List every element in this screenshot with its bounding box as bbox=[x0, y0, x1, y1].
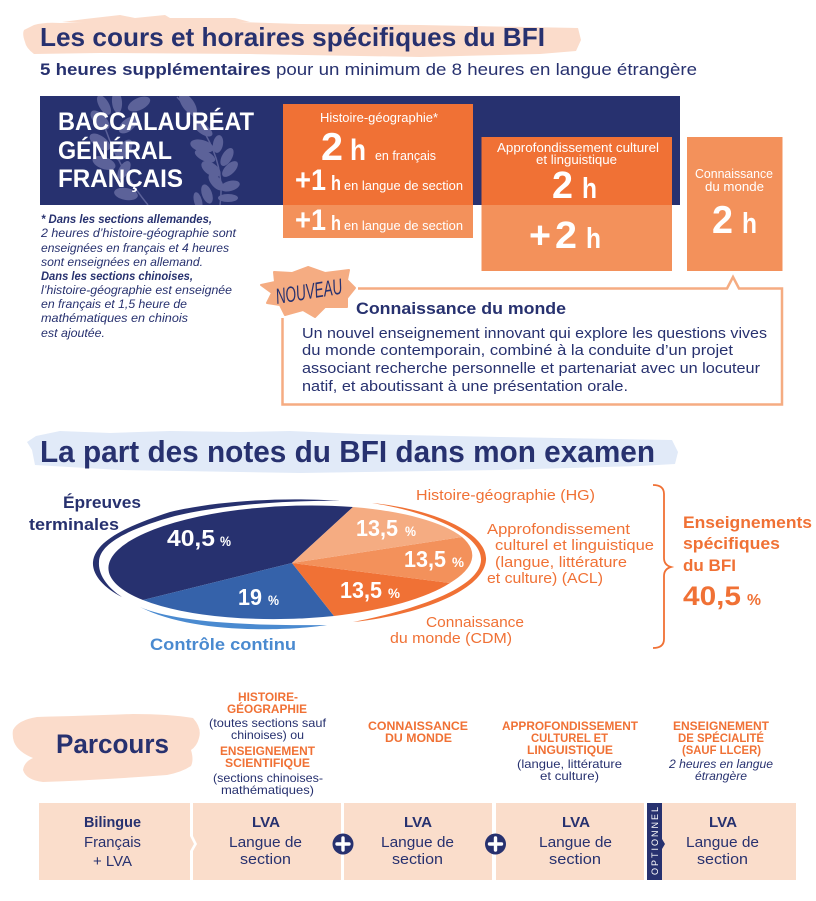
banner: baccalauréat général français: FRANÇAIS bbox=[58, 165, 183, 193]
label: enseignements spécifiques: du BFI bbox=[683, 556, 736, 575]
cell: lva langue de section 1: section bbox=[240, 851, 291, 868]
brace bbox=[653, 485, 671, 648]
cell: bilingue: + LVA bbox=[93, 853, 132, 870]
label: approfondissement: Approfondissement bbox=[487, 521, 631, 538]
column header: histoire-géographie: HISTOIRE- bbox=[238, 690, 298, 704]
column header: approfondissement: APPROFONDISSEMENT bbox=[502, 719, 639, 733]
cell: lva langue de section 2: Langue de bbox=[381, 834, 454, 851]
column header: histoire-géographie: chinoises) ou bbox=[231, 728, 304, 742]
panel: connaissance du monde hours bbox=[687, 137, 782, 271]
label: approfondissement: culturel et linguistique bbox=[495, 537, 654, 554]
subtitle: 5 heures supplémentaires pour un minimum de 8 heures en langue étrangère bbox=[40, 60, 697, 79]
footnote: mathématiques en chinois bbox=[41, 311, 188, 325]
slice: contrôle continu bbox=[143, 563, 334, 619]
heading: parcours bbox=[13, 714, 200, 782]
cell: lva langue de section 2: LVA bbox=[404, 814, 432, 831]
label: enseignements spécifiques: % bbox=[747, 592, 761, 609]
pie chart: 13,5 bbox=[356, 515, 398, 541]
footnote: 2 heures d’histoire-géographie sont bbox=[40, 226, 237, 240]
banner: baccalauréat général français: GÉNÉRAL bbox=[58, 136, 172, 165]
cell: bilingue bbox=[39, 803, 194, 880]
label: enseignements spécifiques: spécifiques bbox=[683, 534, 780, 553]
label: histoire-géographie: Histoire-géographie (HG) bbox=[416, 487, 595, 504]
cell: lva langue de section 3: section bbox=[549, 851, 601, 868]
pie chart: % bbox=[452, 554, 465, 570]
cell: lva langue de section 1: LVA bbox=[252, 814, 280, 831]
footnote bbox=[40, 212, 237, 340]
column header: approfondissement: LINGUISTIQUE bbox=[527, 743, 613, 757]
tag: optionnel: OPTIONNEL bbox=[650, 807, 660, 875]
cell: lva langue de section 1: Langue de bbox=[229, 834, 302, 851]
swoosh: orange bbox=[353, 503, 486, 622]
label: épreuves terminales: terminales bbox=[29, 515, 119, 534]
badge: nouveau bbox=[261, 267, 355, 317]
column header: enseignement de spécialité: ENSEIGNEMENT bbox=[673, 719, 770, 733]
cell: lva langue de section 3: LVA bbox=[562, 814, 590, 831]
footnote: Dans les sections chinoises, bbox=[41, 269, 193, 283]
footnote: enseignées en français et 4 heures bbox=[41, 241, 229, 255]
column header: approfondissement: (langue, littérature bbox=[517, 757, 622, 771]
pie chart: % bbox=[388, 585, 401, 601]
cell: bilingue: Français bbox=[84, 834, 141, 851]
label: connaissance du monde: Connaissance bbox=[426, 614, 524, 631]
pie chart: 13,5 bbox=[340, 577, 382, 603]
panel: connaissance du monde hours: h bbox=[742, 208, 757, 240]
icon: plus 1 bbox=[332, 834, 354, 854]
column header: histoire-géographie: (toutes sections sauf bbox=[209, 716, 327, 730]
column header: histoire-géographie: mathématiques) bbox=[221, 783, 314, 797]
column header: enseignement de spécialité bbox=[668, 719, 773, 783]
column header: histoire-géographie: (sections chinoises- bbox=[213, 771, 323, 785]
panel: histoire-géographie hours: + bbox=[295, 164, 311, 197]
label: contrôle continu: Contrôle continu bbox=[150, 636, 296, 654]
panel: approfondissement hours bbox=[482, 137, 672, 271]
panel: histoire-géographie hours: 1 bbox=[311, 204, 326, 237]
footnote: en français et 1,5 heure de bbox=[41, 297, 187, 311]
panel: approfondissement hours: h bbox=[582, 173, 597, 205]
swoosh: navy bbox=[93, 499, 340, 597]
banner: baccalauréat général français bbox=[40, 90, 680, 211]
callout: connaissance du monde: du monde contemporain, combiné à la conduite d’un projet bbox=[302, 342, 734, 359]
cell: lva langue de section 2: section bbox=[392, 851, 443, 868]
footnote: sont enseignées en allemand. bbox=[41, 255, 203, 269]
pie chart: % bbox=[220, 533, 231, 549]
column header: approfondissement: et culture) bbox=[540, 769, 599, 783]
panel: approfondissement hours: 2 bbox=[552, 165, 573, 207]
cell: bilingue: Bilingue bbox=[84, 814, 141, 831]
heading: share of grades: La part des notes du BFI dans mon examen bbox=[40, 434, 655, 469]
icon: plus 2 bbox=[485, 834, 506, 854]
slice: connaissance du monde bbox=[292, 563, 450, 616]
panel: approfondissement hours: et linguistique bbox=[536, 153, 617, 167]
cell: lva langue de section 3 bbox=[496, 803, 644, 880]
icon: laurel branches bbox=[90, 96, 240, 205]
column header: enseignement de spécialité: 2 heures en langue bbox=[668, 757, 773, 771]
panel: histoire-géographie hours: h bbox=[331, 213, 341, 235]
label: épreuves terminales: Épreuves bbox=[63, 493, 141, 512]
panel: histoire-géographie hours: Histoire-géographie* bbox=[320, 111, 438, 125]
panel: histoire-géographie hours: 2 bbox=[321, 126, 343, 169]
panel: approfondissement hours: + bbox=[529, 215, 551, 257]
column header: approfondissement: CULTUREL ET bbox=[531, 731, 609, 745]
heading: courses and schedules bbox=[23, 15, 581, 57]
panel: histoire-géographie hours: en langue de section bbox=[344, 219, 463, 233]
panel: connaissance du monde hours: Connaissance bbox=[695, 167, 773, 181]
label: connaissance du monde bbox=[390, 614, 524, 647]
column header: enseignement de spécialité: étrangère bbox=[695, 769, 747, 783]
cell: lva langue de section optional: LVA bbox=[709, 814, 737, 831]
callout: connaissance du monde: natif, et aboutissant à une présentation orale. bbox=[302, 378, 628, 395]
pie chart bbox=[93, 499, 486, 629]
callout: connaissance du monde: Connaissance du monde bbox=[356, 299, 566, 318]
slice: épreuves terminales bbox=[108, 505, 353, 600]
panel: histoire-géographie hours: en français bbox=[375, 149, 436, 163]
column header: approfondissement bbox=[502, 719, 639, 783]
cell: lva langue de section optional: Langue de bbox=[686, 834, 759, 851]
slice: histoire-géographie bbox=[292, 507, 462, 563]
footnote: l’histoire-géographie est enseignée bbox=[41, 283, 232, 297]
label: enseignements spécifiques bbox=[683, 513, 812, 611]
label: enseignements spécifiques: Enseignements bbox=[683, 513, 812, 532]
callout: connaissance du monde: associant recherche personnelle et partenariat avec un locuteur bbox=[302, 360, 760, 377]
panel: approfondissement hours: 2 bbox=[555, 215, 577, 257]
pie chart: 40,5 bbox=[167, 525, 215, 551]
footnote: * Dans les sections allemandes, bbox=[41, 212, 212, 226]
pie chart: 13,5 bbox=[404, 546, 446, 572]
cell: lva langue de section 3: Langue de bbox=[539, 834, 612, 851]
panel: histoire-géographie hours: + bbox=[295, 204, 311, 237]
column header: histoire-géographie: ENSEIGNEMENT bbox=[220, 744, 316, 758]
panel: histoire-géographie hours: 1 bbox=[311, 164, 326, 197]
label: approfondissement bbox=[487, 521, 654, 587]
panel: approfondissement hours: Approfondissement culturel bbox=[497, 141, 659, 155]
banner: baccalauréat général français: BACCALAURÉAT bbox=[58, 107, 254, 136]
callout: connaissance du monde: Un nouvel enseignement innovant qui explore les questions vives bbox=[302, 325, 767, 342]
callout: connaissance du monde bbox=[282, 277, 782, 404]
pie chart: % bbox=[268, 592, 279, 608]
panel: histoire-géographie hours: en langue de section bbox=[344, 179, 463, 193]
heading: courses and schedules: Les cours et horaires spécifiques du BFI bbox=[40, 22, 545, 52]
label: enseignements spécifiques: 40,5 bbox=[683, 581, 741, 611]
cell: lva langue de section 1 bbox=[193, 803, 341, 880]
panel: connaissance du monde hours: du monde bbox=[705, 180, 764, 194]
column header: enseignement de spécialité: (SAUF LLCER) bbox=[682, 743, 761, 757]
panel: histoire-géographie hours bbox=[283, 104, 473, 238]
panel: histoire-géographie hours: h bbox=[350, 134, 366, 167]
label: épreuves terminales bbox=[29, 493, 141, 534]
heading: parcours: Parcours bbox=[56, 729, 169, 759]
cell: lva langue de section optional: section bbox=[697, 851, 748, 868]
column header: enseignement de spécialité: DE SPÉCIALITÉ bbox=[678, 730, 764, 745]
footnote: est ajoutée. bbox=[41, 326, 105, 340]
column header: connaissance du monde bbox=[368, 719, 468, 745]
cell: lva langue de section 2 bbox=[344, 803, 492, 880]
column header: histoire-géographie: SCIENTIFIQUE bbox=[225, 756, 310, 770]
panel: connaissance du monde hours: 2 bbox=[712, 199, 733, 242]
pie chart: 19 bbox=[238, 584, 262, 610]
column header: histoire-géographie bbox=[209, 690, 327, 797]
tag: optionnel bbox=[647, 803, 665, 880]
cell: lva langue de section optional bbox=[662, 803, 796, 880]
column header: connaissance du monde: DU MONDE bbox=[385, 731, 452, 745]
column header: histoire-géographie: GÉOGRAPHIE bbox=[227, 701, 307, 716]
slice: approfondissement bbox=[292, 537, 472, 583]
label: approfondissement: (langue, littérature bbox=[495, 554, 627, 571]
badge: nouveau: NOUVEAU bbox=[274, 274, 344, 309]
panel: histoire-géographie hours: h bbox=[331, 173, 341, 195]
pie chart: % bbox=[405, 523, 416, 539]
label: approfondissement: et culture) (ACL) bbox=[487, 570, 603, 587]
swoosh: blue bbox=[140, 607, 327, 629]
panel: approfondissement hours: h bbox=[586, 223, 601, 255]
label: connaissance du monde: du monde (CDM) bbox=[390, 630, 512, 647]
column header: connaissance du monde: CONNAISSANCE bbox=[368, 719, 468, 733]
